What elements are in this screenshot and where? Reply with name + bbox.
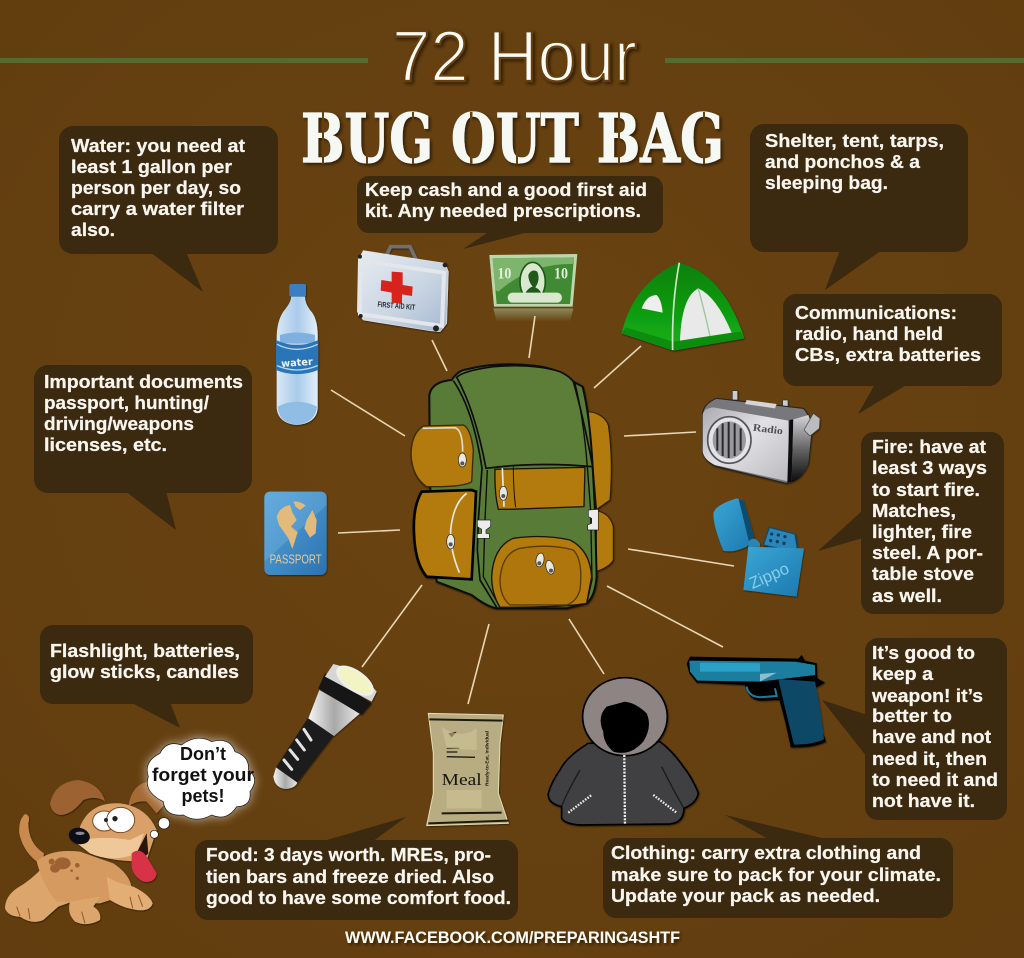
- footer url: WWW.FACEBOOK.COM/PREPARING4SHTF: [345, 928, 680, 947]
- callout: weapon: better to: [872, 705, 952, 726]
- thought bubble: don't forget your pets: pets!: [181, 786, 225, 806]
- callout: food: Food: 3 days worth. MREs, pro-: [206, 844, 491, 865]
- callout: weapon: [822, 638, 1007, 820]
- icon: passport: [264, 492, 327, 575]
- callout: weapon: weapon! it’s: [871, 685, 983, 706]
- icon: water bottle: [276, 284, 318, 425]
- title rule left: [0, 58, 368, 63]
- callout: shelter: and ponchos & a: [765, 151, 921, 172]
- callout: weapon: It’s good to: [872, 642, 975, 663]
- callout: documents: [34, 365, 252, 530]
- thought bubble: don't forget your pets: forget your: [152, 765, 254, 785]
- callout: water: [59, 126, 278, 292]
- icon: ten dollar bill: [489, 254, 577, 322]
- title: 72 Hour: 72 Hour: [392, 17, 637, 97]
- callout: food: [195, 817, 518, 920]
- title rule right: [665, 58, 1024, 63]
- callout: shelter: sleeping bag.: [765, 172, 888, 193]
- icon: water bottle: water: [281, 357, 313, 370]
- callout: weapon: not have it.: [872, 790, 975, 811]
- icon: first aid kit: FIRST AID KIT: [377, 300, 416, 312]
- callout: shelter: Shelter, tent, tarps,: [765, 130, 944, 151]
- callout: fire: [818, 432, 1004, 614]
- callout: flashlight: [40, 625, 253, 728]
- icon: zippo lighter: Zippo: [746, 559, 792, 593]
- callout: weapon: have and not: [872, 726, 991, 747]
- icon: MRE meal pouch: Meal: [442, 770, 482, 789]
- callout: weapon: to need it and: [872, 769, 998, 790]
- icon: backpack: [411, 364, 613, 608]
- icon: radio: Radio: [752, 423, 783, 437]
- icon: zippo lighter: [713, 498, 804, 597]
- callout: documents: licenses, etc.: [44, 434, 167, 455]
- connector lines: [331, 316, 734, 704]
- callout: fire: table stove: [872, 563, 974, 584]
- callout: communications: radio, hand held: [795, 323, 943, 344]
- icon: ten dollar bill: 10: [554, 265, 568, 282]
- callout: fire: to start fire.: [872, 479, 980, 500]
- callout: fire: least 3 ways: [872, 457, 987, 478]
- callout: water: person per day, so: [71, 177, 241, 198]
- callout: fire: as well.: [872, 585, 942, 606]
- icon: MRE meal pouch: [427, 713, 508, 826]
- callout: weapon: need it, then: [872, 748, 987, 769]
- callout: communications: CBs, extra batteries: [795, 344, 981, 365]
- icon: tent: [622, 263, 744, 351]
- icon: radio: [703, 391, 820, 483]
- callout: fire: Fire: have at: [872, 436, 986, 457]
- icon: passport: PASSPORT: [270, 553, 322, 567]
- callout: water: carry a water filter: [71, 198, 244, 219]
- callout: clothing: Clothing: carry extra clothing and: [611, 842, 921, 863]
- callout: fire: steel. A por-: [872, 542, 983, 563]
- callout: water: Water: you need at: [71, 135, 245, 156]
- callout: cash and first aid: kit. Any needed prescriptions.: [365, 200, 641, 221]
- icon: MRE meal pouch: Ready-to-Eat, Individual: [484, 731, 489, 786]
- callout: documents: passport, hunting/: [44, 392, 209, 413]
- thought bubble: don't forget your pets: Don’t: [180, 744, 226, 764]
- callout: water: least 1 gallon per: [71, 156, 232, 177]
- icon: parka jacket: [548, 678, 698, 825]
- callout: documents: driving/weapons: [44, 413, 194, 434]
- callout: flashlight: Flashlight, batteries,: [50, 640, 240, 661]
- callout: flashlight: glow sticks, candles: [50, 661, 239, 682]
- callout: cash and first aid: Keep cash and a good first aid: [365, 179, 647, 200]
- icon: pistol: [687, 655, 826, 747]
- callout: documents: Important documents: [44, 371, 243, 392]
- callout: weapon: keep a: [872, 663, 934, 684]
- callout: fire: lighter, fire: [872, 521, 972, 542]
- callout: water: also.: [71, 219, 115, 240]
- callout: communications: Communications:: [795, 302, 957, 323]
- callout: shelter: [750, 124, 968, 290]
- callout: clothing: [603, 815, 953, 918]
- callout: fire: Matches,: [872, 500, 956, 521]
- icon: flashlight: [273, 661, 377, 789]
- callout: communications: [783, 294, 1002, 414]
- callout: cash and first aid: [357, 176, 663, 249]
- title: Bug Out Bag: BUG OUT BAG: [301, 99, 724, 178]
- icon: dog: [5, 780, 168, 924]
- callout: clothing: Update your pack as needed.: [611, 885, 880, 906]
- icon: first aid kit: [357, 247, 448, 332]
- callout: food: good to have some comfort food.: [206, 887, 511, 908]
- icon: ten dollar bill: 10: [497, 265, 511, 282]
- thought bubble: don't forget your pets: [147, 738, 255, 838]
- callout: food: tien bars and freeze dried. Also: [206, 866, 494, 887]
- callout: clothing: make sure to pack for your climate.: [611, 864, 941, 885]
